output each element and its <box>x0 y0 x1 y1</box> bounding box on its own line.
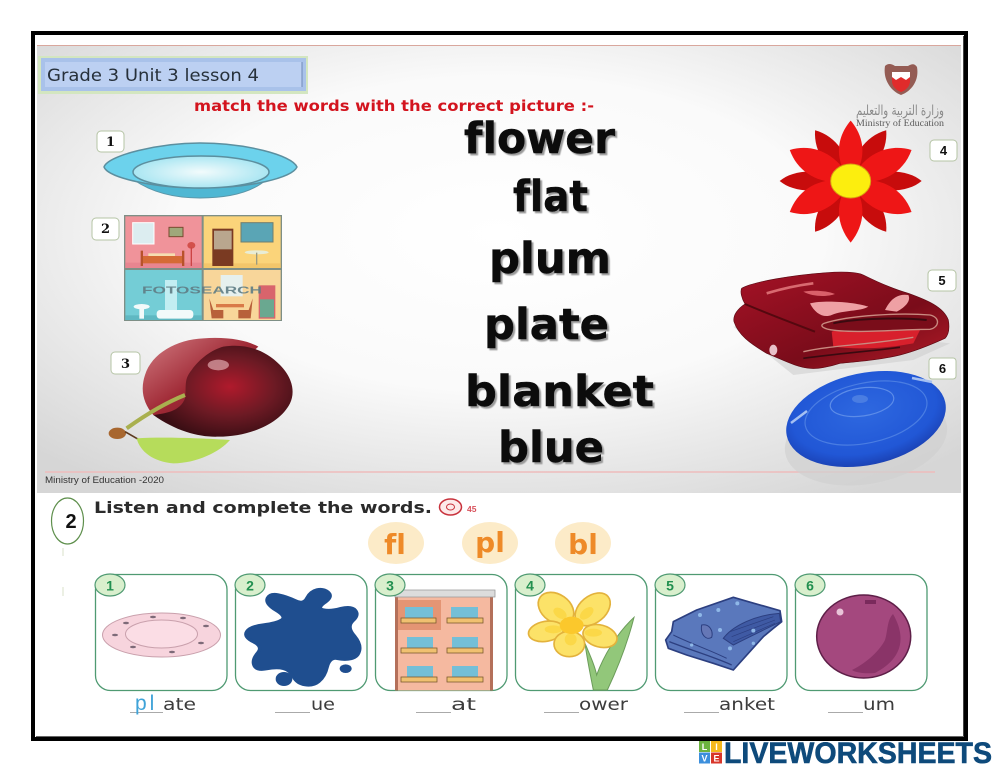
letter bubble pl <box>462 522 518 564</box>
logo squares: V <box>701 754 708 764</box>
number tag 1: 1 <box>106 135 115 150</box>
logo wordmark: LIVEWORKSHEETS <box>724 737 992 770</box>
watermark: FOTOSEARCH <box>142 285 262 296</box>
word list: plate <box>484 300 609 350</box>
badge 4: 4 <box>526 578 534 594</box>
number tag 6 <box>929 358 956 379</box>
number tag 5 <box>928 270 956 291</box>
number tag 2 <box>92 218 119 240</box>
icon: audio cd <box>440 499 462 515</box>
number tag 3: 3 <box>121 357 130 372</box>
panel: match the words slide <box>37 46 961 498</box>
icon: blue plate <box>104 143 297 198</box>
track number: 45 <box>467 504 477 514</box>
letter bubble pl: pl <box>475 526 505 559</box>
badge 3: 3 <box>386 578 394 594</box>
answer: plate: pl <box>135 692 157 715</box>
icon: blue disc <box>777 357 955 498</box>
letter bubble fl: fl <box>384 528 406 561</box>
answer: plate: ate <box>163 695 196 714</box>
heading: Listen and complete the words. <box>94 498 432 517</box>
icon: coat of arms <box>885 64 917 95</box>
letter bubble bl: bl <box>568 528 598 561</box>
card 4: yellow flower <box>515 574 647 690</box>
answer: flat <box>416 695 477 714</box>
word answers row <box>130 692 895 715</box>
number tag 2: 2 <box>101 222 110 237</box>
icon: blue folded blanket <box>666 597 782 670</box>
number tag 5: 5 <box>938 273 946 288</box>
Ministry of Education logo <box>856 64 944 129</box>
badge 5: 5 <box>666 578 674 594</box>
instruction heading: match the words with the correct picture :- <box>194 97 594 115</box>
footer text: Ministry of Education -2020 <box>45 475 164 486</box>
answer: plum: um <box>863 695 895 714</box>
word list: blanket <box>465 367 654 417</box>
answer: plate <box>130 692 196 715</box>
icon: red blanket <box>733 272 950 375</box>
lesson title box: Grade 3 Unit 3 lesson 4 <box>47 66 259 86</box>
answer: blue: ue <box>311 695 335 714</box>
logo squares: E <box>713 754 720 764</box>
answer: flower <box>544 695 628 714</box>
badge 2: 2 <box>246 578 254 594</box>
icon: purple plum <box>817 595 911 678</box>
badge 1: 1 <box>106 578 114 594</box>
answer: blue <box>275 695 335 714</box>
number tag 4: 4 <box>940 143 948 158</box>
english name: Ministry of Education <box>856 118 944 129</box>
card 1: plate <box>95 574 227 690</box>
card 5: blue blanket <box>655 574 787 690</box>
word list <box>464 114 654 473</box>
card 3: flat building <box>375 574 507 690</box>
card 2: blue splash <box>235 574 367 690</box>
answer: blanket <box>684 695 776 714</box>
card 6: purple plum <box>795 574 927 690</box>
number tag 4 <box>930 140 957 161</box>
exercise number 2: 2 <box>65 511 77 533</box>
number tag 1 <box>97 131 124 152</box>
letter bubble fl <box>368 522 424 564</box>
answer: blanket: anket <box>719 695 776 714</box>
icon: red flower <box>780 121 922 243</box>
answer: flat: at <box>451 695 477 714</box>
arabic name: وزارة التربية والتعليم <box>856 103 944 119</box>
small side marks <box>62 548 64 596</box>
icon: pink plate <box>102 613 220 657</box>
answer: flower: ower <box>579 695 628 714</box>
lesson title box <box>38 56 308 94</box>
answer: plum <box>828 695 895 714</box>
icon: apartment building <box>395 590 495 690</box>
Liveworksheets logo <box>699 737 992 770</box>
word list: blue <box>498 423 604 473</box>
icon: plum fruit <box>109 338 293 463</box>
word list: plum <box>489 234 611 284</box>
word list: flower <box>464 114 616 164</box>
icon: flat rooms illustration <box>124 215 282 321</box>
exercise number 2 <box>52 498 84 544</box>
number tag 6: 6 <box>939 361 946 376</box>
logo squares <box>699 741 722 764</box>
badge 6: 6 <box>806 578 814 594</box>
icon: yellow flower with leaves <box>527 586 634 690</box>
logo squares: I <box>715 742 718 752</box>
number tag 3 <box>111 352 140 374</box>
logo squares: L <box>702 742 708 752</box>
icon: blue splash <box>246 590 360 686</box>
panel: listen and complete <box>52 498 927 715</box>
letter bubble bl <box>555 522 611 564</box>
word list: flat <box>513 172 588 222</box>
